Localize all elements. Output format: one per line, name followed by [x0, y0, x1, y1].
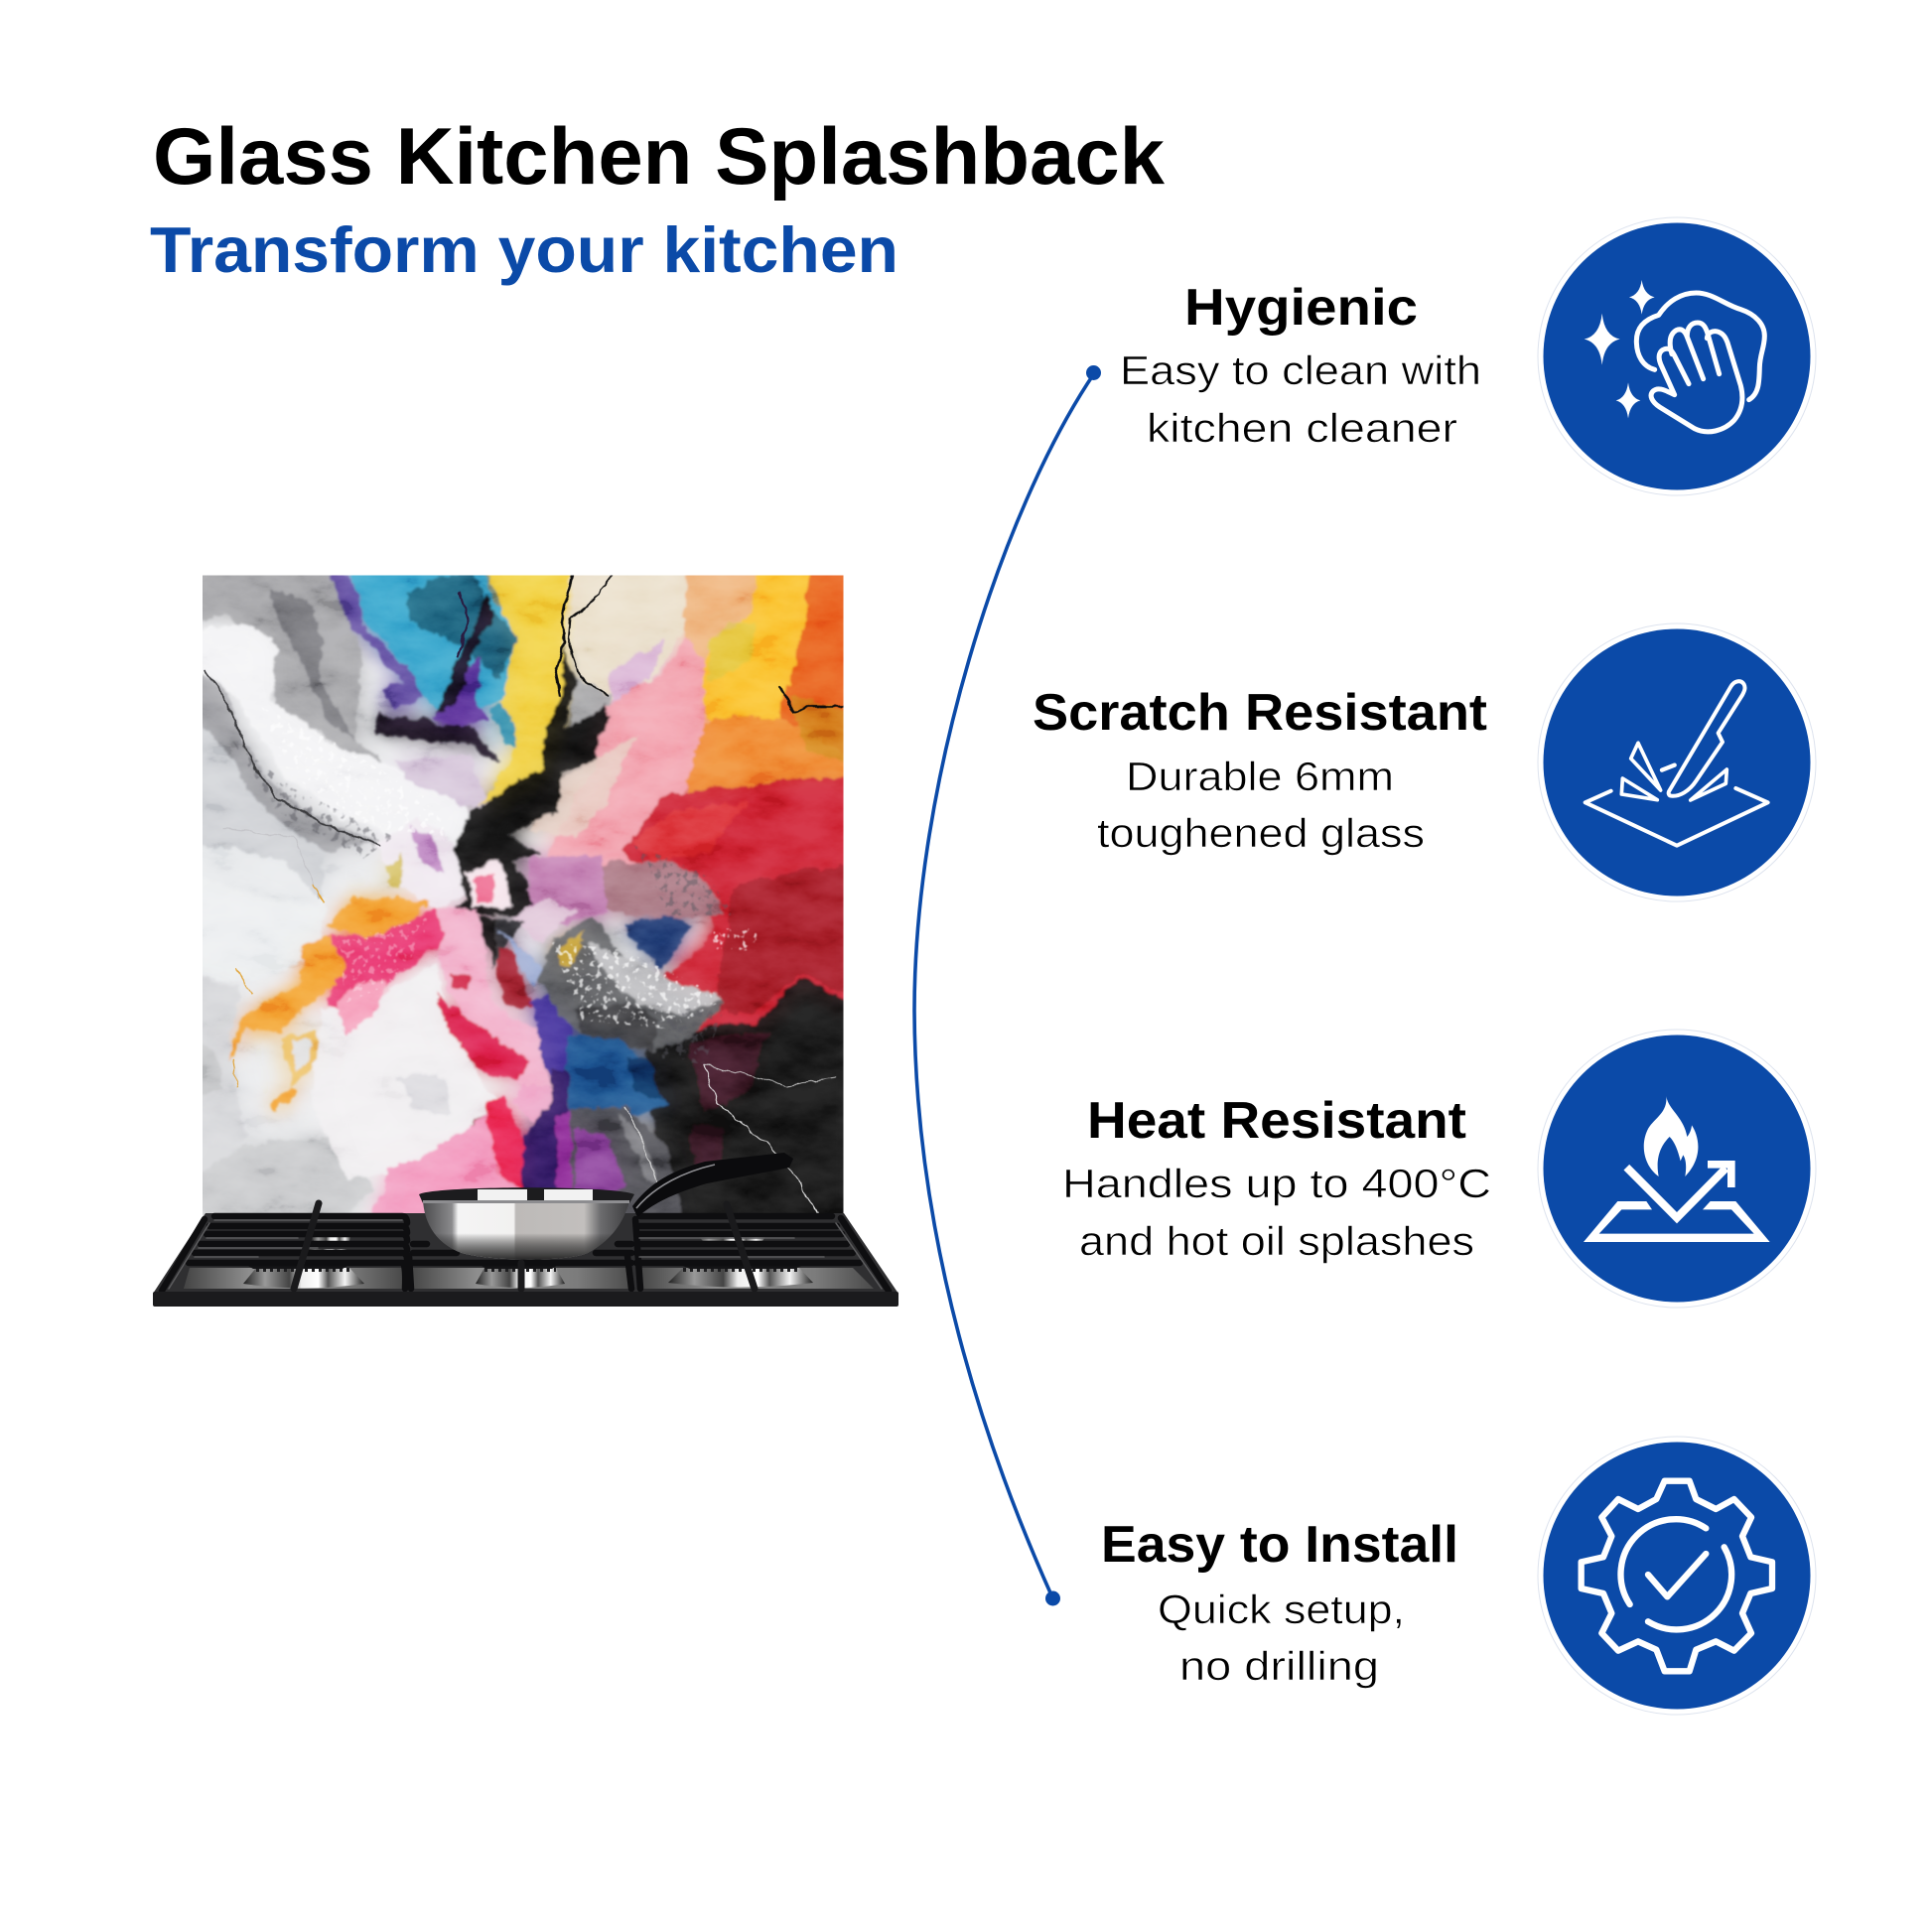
connector curve with end dots — [914, 365, 1101, 1606]
heading: Easy to Install — [1101, 1516, 1458, 1574]
icon: gear with check mark — [1538, 1437, 1816, 1715]
product image: splashback above hob — [153, 566, 898, 1307]
grate bars — [162, 1216, 889, 1291]
icon: knife on glass surface — [1538, 623, 1816, 901]
title: Glass Kitchen Splashback — [153, 112, 1166, 202]
steel wells — [184, 1268, 874, 1289]
description: Easy to clean with — [1120, 347, 1481, 393]
dark speckles — [232, 741, 735, 1064]
feature: Easy to Install — [1101, 1516, 1458, 1689]
hob front edge — [153, 1292, 898, 1307]
subtitle: Transform your kitchen — [150, 213, 898, 286]
upright grate bars — [294, 1203, 755, 1289]
heading: Heat Resistant — [1087, 1092, 1466, 1150]
hob surface — [153, 1213, 898, 1294]
description: and hot oil splashes — [1079, 1218, 1474, 1264]
light speckles — [320, 737, 758, 1029]
icon: flame over heat-reflecting surface — [1538, 1030, 1816, 1308]
description — [1062, 1161, 1491, 1264]
pan handle — [632, 1153, 793, 1217]
description: Quick setup, — [1158, 1587, 1405, 1632]
description — [1097, 754, 1425, 856]
veins — [207, 576, 843, 1221]
pan rim — [419, 1187, 634, 1203]
description — [1120, 347, 1481, 451]
description — [1158, 1587, 1405, 1689]
heading: Scratch Resistant — [1033, 684, 1487, 742]
description: toughened glass — [1097, 810, 1425, 856]
heading: Hygienic — [1184, 279, 1418, 337]
burners — [243, 1234, 813, 1289]
feature: Scratch Resistant — [1033, 684, 1487, 856]
frying pan — [419, 1153, 793, 1260]
description: no drilling — [1179, 1643, 1379, 1689]
description: Handles up to 400°C — [1062, 1161, 1491, 1206]
pan body — [423, 1201, 629, 1260]
feature: Hygienic — [1120, 279, 1481, 451]
description: Durable 6mm — [1126, 754, 1394, 799]
icon: hand wiping with sparkles — [1538, 217, 1816, 495]
gas hob — [153, 1203, 898, 1307]
feature: Heat Resistant — [1062, 1092, 1491, 1264]
description: kitchen cleaner — [1147, 405, 1457, 451]
splashback panel: abstract marble paint — [189, 566, 853, 1234]
marbling texture — [203, 576, 843, 1231]
